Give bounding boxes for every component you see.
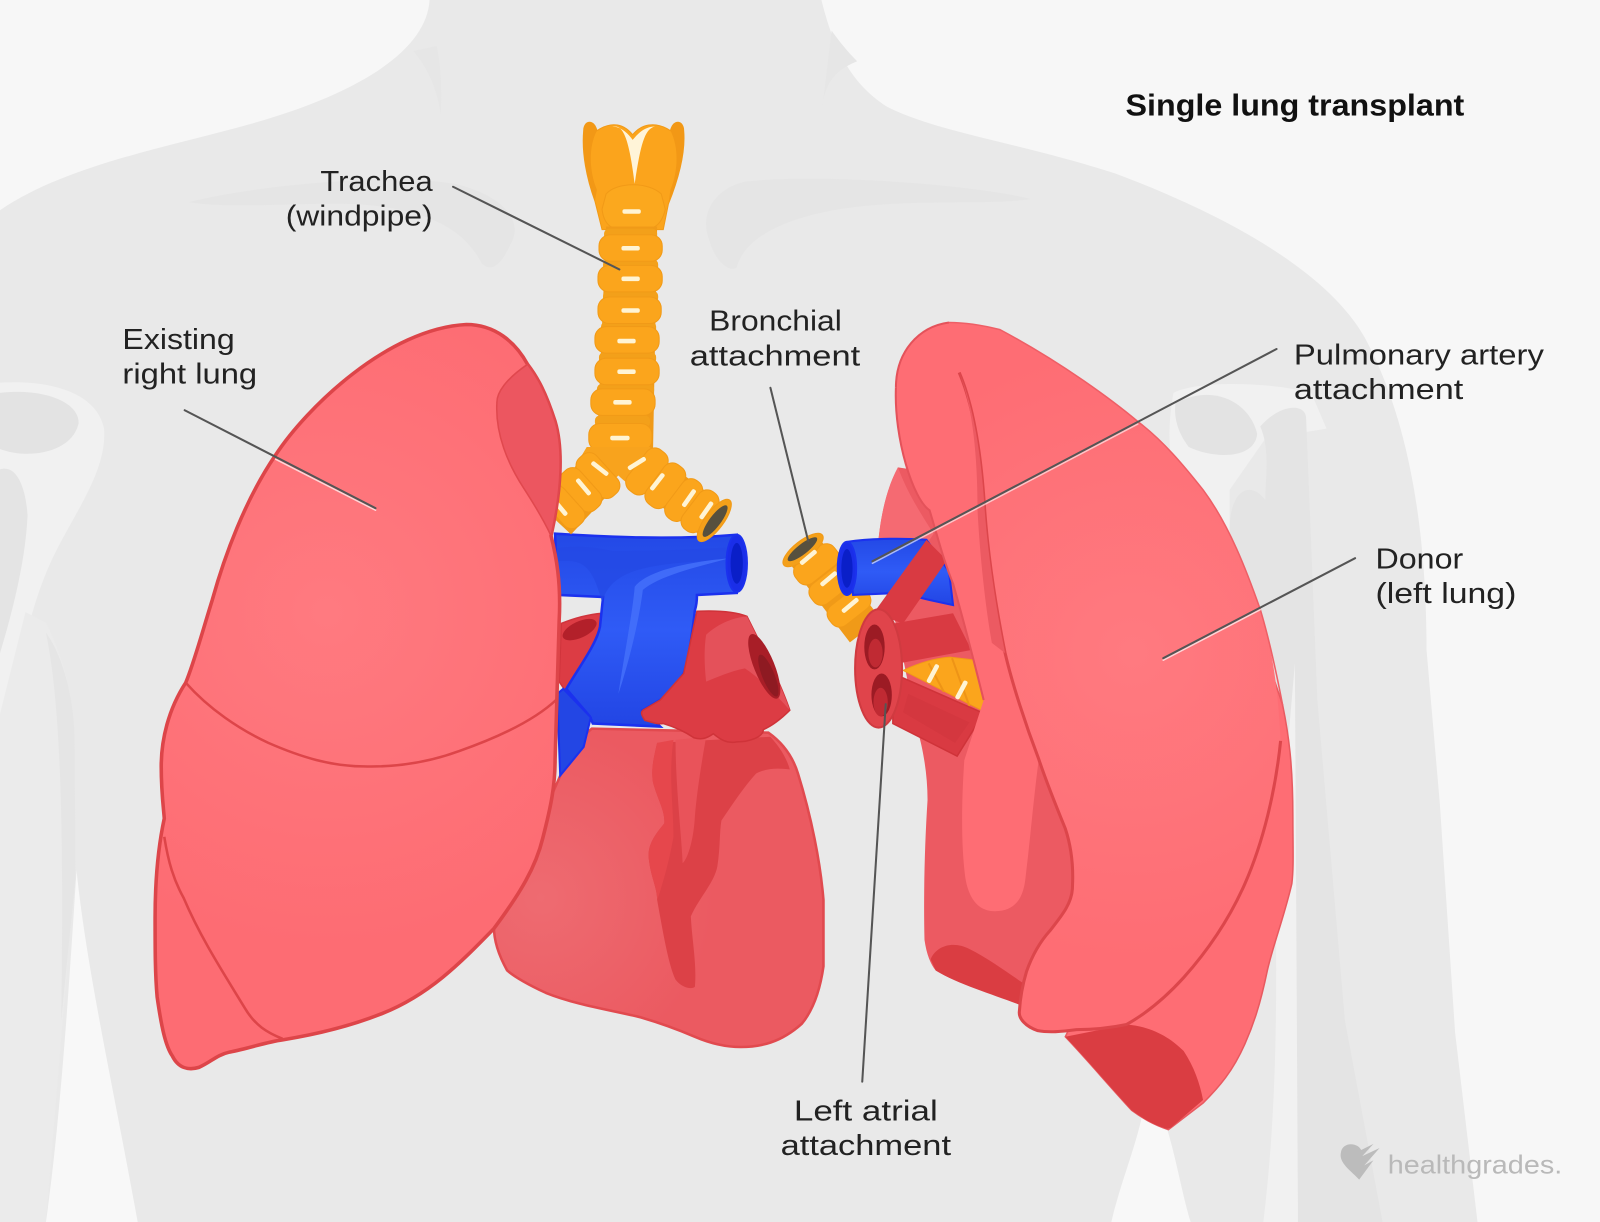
trachea: [539, 122, 737, 546]
label: pulmonary artery attachment: attachment: [1294, 374, 1463, 406]
label: bronchial attachment: Bronchial: [709, 306, 842, 338]
healthgrades logo: healthgrades.: [1388, 1151, 1562, 1179]
oblique fissure: [164, 837, 283, 1039]
pulmonary artery, recipient side: [555, 534, 747, 776]
front lobe: [949, 322, 1281, 1032]
existing right lung: [155, 325, 560, 1069]
label: bronchial attachment: attachment: [690, 340, 860, 372]
dark lower edge: [1065, 1025, 1203, 1129]
leader: pulmonary artery attachment: [872, 349, 1277, 563]
label: left atrial attachment: [781, 1095, 951, 1162]
label: existing right lung: right lung: [122, 359, 257, 391]
leader: left atrial attachment: [862, 704, 886, 1082]
label: trachea: Trachea: [320, 166, 433, 198]
tracheal rings: [589, 235, 662, 451]
ring highlights: [552, 209, 714, 520]
upper and medial lobe: [896, 322, 1061, 911]
thyroid cartilage: [583, 122, 684, 231]
label: bronchial attachment: [690, 306, 860, 372]
leader lines: [185, 187, 1355, 1082]
label: trachea: (windpipe): [286, 201, 433, 233]
label: donor left lung: Donor: [1376, 543, 1464, 575]
tracheal carina and bronchi: [573, 447, 663, 492]
label: left atrial attachment: Left atrial: [794, 1095, 938, 1127]
label: left atrial attachment: attachment: [781, 1130, 951, 1162]
label: existing right lung: [122, 324, 257, 391]
leader: donor left lung: [1163, 558, 1355, 660]
donor atrial vessels: [855, 540, 984, 756]
healthgrades logo: [1341, 1144, 1562, 1180]
label: donor left lung: (left lung): [1376, 578, 1516, 610]
medial shadow: [497, 364, 560, 536]
fold shading: [959, 372, 1005, 653]
label: pulmonary artery attachment: Pulmonary artery: [1294, 339, 1545, 371]
donor bronchus: [778, 528, 986, 712]
bronchus cut end: [692, 495, 737, 546]
aortic arch behind vein: [559, 613, 612, 694]
donor bronchus cut end: [778, 528, 828, 572]
horizontal fissure: [186, 683, 557, 766]
aorta stump, recipient side: [642, 611, 790, 742]
dark base: [931, 945, 1026, 1005]
donor left lung front: [896, 322, 1283, 1032]
atrial cuff: [855, 609, 902, 728]
title: Single lung transplant: [1126, 88, 1464, 122]
donor left lung back section: [878, 467, 1082, 1005]
donor right outer lobe: [1065, 653, 1293, 1130]
heart: [494, 729, 823, 1047]
donor pulmonary artery: [838, 539, 953, 605]
heart groove: [649, 737, 790, 988]
front lobe boundary: [959, 372, 1281, 1032]
leader: existing right lung: [185, 410, 376, 510]
label: existing right lung: Existing: [122, 324, 235, 356]
leader: trachea: [453, 187, 619, 269]
label: pulmonary artery attachment: [1294, 339, 1545, 406]
label: donor left lung: [1376, 543, 1516, 610]
label: trachea: [286, 166, 433, 233]
leader: bronchial attachment: [770, 388, 808, 541]
